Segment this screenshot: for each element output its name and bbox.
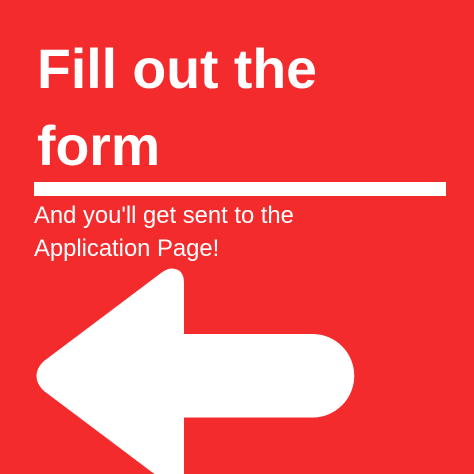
- title line 2: form: [37, 115, 160, 177]
- subtitle text: [34, 202, 294, 262]
- title: [37, 38, 317, 177]
- white divider bar: [34, 182, 446, 196]
- title line 1: Fill out the: [37, 38, 317, 100]
- subtitle line 2: Application Page!: [34, 235, 219, 262]
- subtitle line 1: And you'll get sent to the: [34, 202, 294, 229]
